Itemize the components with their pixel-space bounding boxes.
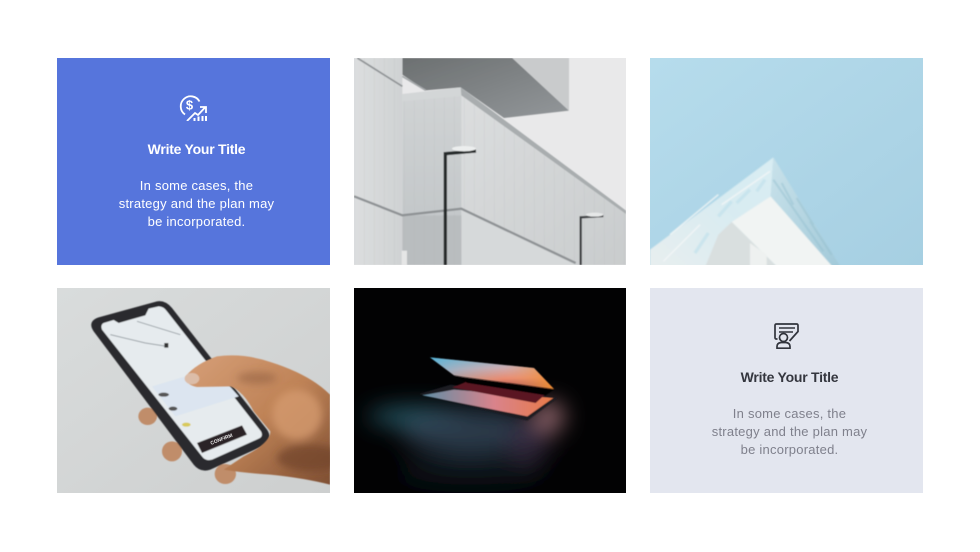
panel: phone in hand photo: CONFIRM: [210, 433, 234, 447]
body text: [119, 178, 274, 229]
heading: Write Your Title: [741, 369, 838, 385]
body text: In some cases, the: [733, 406, 846, 421]
body text: [712, 406, 867, 457]
body text: strategy and the plan may: [119, 196, 274, 211]
body text: be incorporated.: [741, 442, 838, 457]
panel: light grey text card: [650, 288, 923, 493]
panel: blue sky building photo: [650, 58, 923, 265]
icon: dollar coin with growth arrow: [180, 95, 207, 121]
panel: glowing laptop photo: [354, 288, 626, 493]
heading: Write Your Title: [148, 141, 245, 157]
body text: In some cases, the: [140, 178, 253, 193]
icon: presenter with speech screen: [774, 323, 799, 349]
panel: grey building photo: [354, 58, 626, 265]
floor glow: [367, 401, 564, 485]
panel: phone in hand photo: [57, 288, 330, 493]
body text: be incorporated.: [148, 214, 245, 229]
panel: blue text card: [57, 58, 330, 265]
icon: dollar coin with growth arrow: $: [186, 98, 194, 112]
body text: strategy and the plan may: [712, 424, 867, 439]
